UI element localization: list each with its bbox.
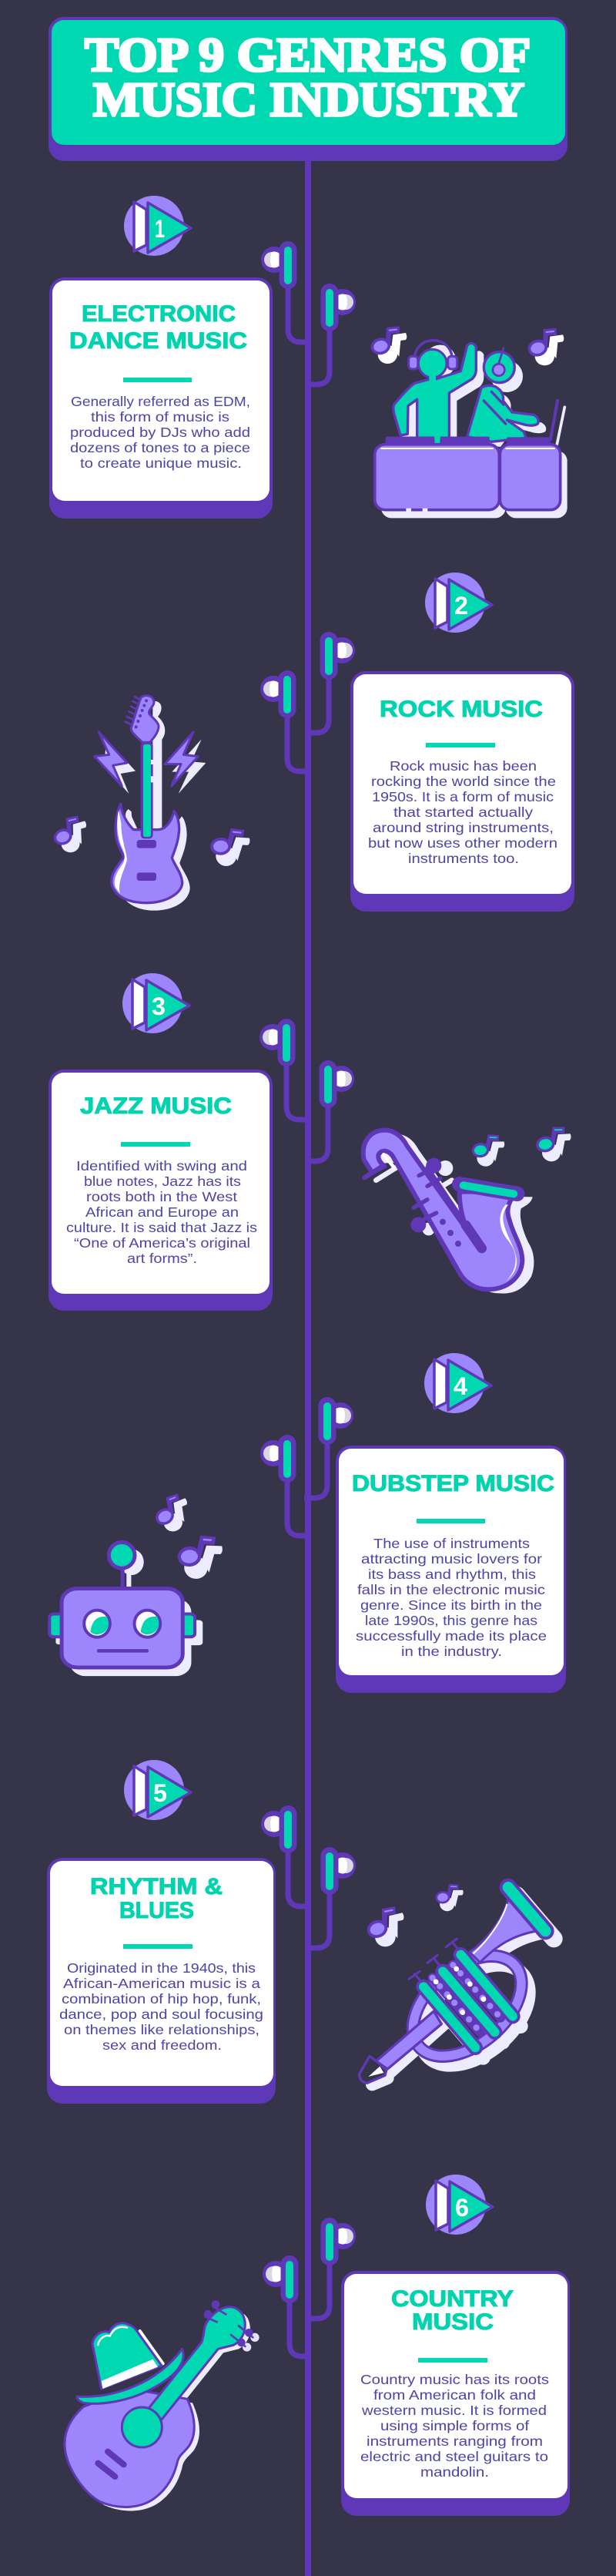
badge 5: 5 (153, 1779, 167, 1807)
card: country music: MUSIC (412, 2309, 494, 2335)
card: dubstep music: The use of instruments (373, 1536, 530, 1551)
card: electronic dance music: dozens of tones to a piece (70, 440, 250, 455)
card: electronic dance music: this form of music is (91, 409, 229, 425)
card: jazz music (49, 1070, 273, 1311)
card: rhythm and blues: BLUES (119, 1898, 194, 1923)
timeline spine (305, 145, 311, 2576)
card: rhythm and blues: sex and freedom. (102, 2037, 222, 2053)
card: rock music: but now uses other modern (368, 835, 557, 851)
earbuds 6 (265, 2218, 353, 2356)
card: rhythm and blues: dance, pop and soul focusing (59, 2007, 263, 2022)
card: jazz music: “One of America’s original (74, 1235, 250, 1251)
card: jazz music: Identified with swing and (76, 1158, 247, 1174)
card: country music: electric and steel guitars to (360, 2449, 548, 2464)
section 4: dubstep music (49, 1353, 566, 1693)
section 3: jazz music (49, 973, 572, 1311)
card: electronic dance music: ELECTRONIC (82, 301, 236, 327)
card: country music: COUNTRY (391, 2286, 514, 2312)
section 6: country music (65, 2175, 570, 2516)
card: jazz music: African and Europe an (85, 1204, 239, 1220)
card: dubstep music: falls in the electronic music (357, 1582, 545, 1597)
card: rhythm and blues: on themes like relationships, (64, 2022, 259, 2037)
badge 3: 3 (152, 992, 166, 1020)
title banner: TOP 9 GENRES OF (85, 29, 531, 82)
card: country music: using simple forms of (380, 2418, 529, 2433)
earbuds 4 (263, 1397, 351, 1536)
card: country music: instruments ranging from (367, 2433, 543, 2449)
badge 6: 6 (455, 2194, 469, 2222)
card: jazz music: blue notes, Jazz has its (84, 1174, 241, 1189)
card: rock music: ROCK MUSIC (380, 697, 543, 722)
card: electronic dance music: Generally referred as EDM, (71, 394, 250, 409)
card: rock music: around string instruments, (373, 820, 554, 835)
card: electronic dance music: DANCE MUSIC (69, 328, 247, 354)
card: rock music: 1950s. It is a form of music (372, 789, 554, 804)
badge 2: 2 (454, 592, 468, 620)
card: dubstep music: successfully made its place (356, 1628, 547, 1644)
card: country music: Country music has its roots (360, 2372, 549, 2387)
card: country music: western music. It is formed (361, 2403, 547, 2418)
badge 5 (124, 1760, 191, 1820)
earbuds 3 (262, 1019, 352, 1161)
card: rhythm and blues: Originated in the 1940s, this (67, 1960, 256, 1976)
card: rock music: instruments too. (408, 851, 519, 866)
icon: saxophone (363, 1125, 572, 1294)
card: jazz music: roots both in the West (86, 1189, 237, 1204)
title banner: MUSIC INDUSTRY (93, 74, 524, 126)
section 5: rhythm and blues (47, 1760, 554, 2104)
card: country music: from American folk and (373, 2387, 536, 2403)
icon: electric guitar (51, 696, 252, 911)
card: dubstep music: genre. Since its birth in the (360, 1597, 542, 1613)
card: rock music: rocking the world since the (371, 774, 556, 789)
earbuds 5 (263, 1805, 353, 1948)
card: electronic dance music (49, 277, 273, 519)
badge 3 (122, 973, 189, 1033)
card: dubstep music: its bass and rhythm, this (368, 1567, 536, 1582)
badge 4 (424, 1353, 491, 1413)
section 2: rock music (51, 573, 574, 912)
card: rhythm and blues: RHYTHM & (90, 1874, 223, 1899)
card: country music (341, 2271, 570, 2516)
card: electronic dance music: produced by DJs who add (70, 425, 250, 440)
badge 4: 4 (454, 1372, 467, 1400)
card: dubstep music: in the industry. (401, 1644, 502, 1659)
badge 2 (425, 573, 492, 633)
icon: robot (49, 1493, 224, 1676)
card: country music: mandolin. (420, 2464, 489, 2480)
card: rhythm and blues: combination of hip hop, funk, (62, 1991, 261, 2007)
card: rhythm and blues (47, 1858, 276, 2104)
title banner (49, 17, 567, 161)
badge 6 (426, 2175, 493, 2235)
card: electronic dance music: to create unique music. (80, 455, 242, 471)
card: dubstep music: late 1990s, this genre has (365, 1613, 537, 1628)
icon: DJs at a deck (370, 327, 567, 518)
card: dubstep music (336, 1446, 566, 1693)
card: rock music: that started actually (393, 804, 533, 820)
icon: trumpet (360, 1882, 554, 2085)
badge 1: 1 (155, 215, 165, 243)
card: dubstep music: attracting music lovers for (361, 1551, 542, 1567)
card: jazz music: art forms”. (127, 1251, 197, 1266)
section 1: electronic dance music (49, 196, 567, 519)
icon: acoustic guitar with cowboy hat (65, 2300, 259, 2511)
earbuds 2 (263, 632, 353, 771)
earbuds 1 (263, 241, 353, 385)
card: rock music (350, 671, 574, 912)
card: jazz music: JAZZ MUSIC (80, 1093, 232, 1119)
card: jazz music: culture. It is said that Jazz is (66, 1220, 257, 1235)
badge 1 (124, 196, 191, 256)
card: dubstep music: DUBSTEP MUSIC (352, 1471, 554, 1496)
card: rock music: Rock music has been (390, 758, 537, 774)
card: rhythm and blues: African-American music is a (63, 1976, 260, 1991)
